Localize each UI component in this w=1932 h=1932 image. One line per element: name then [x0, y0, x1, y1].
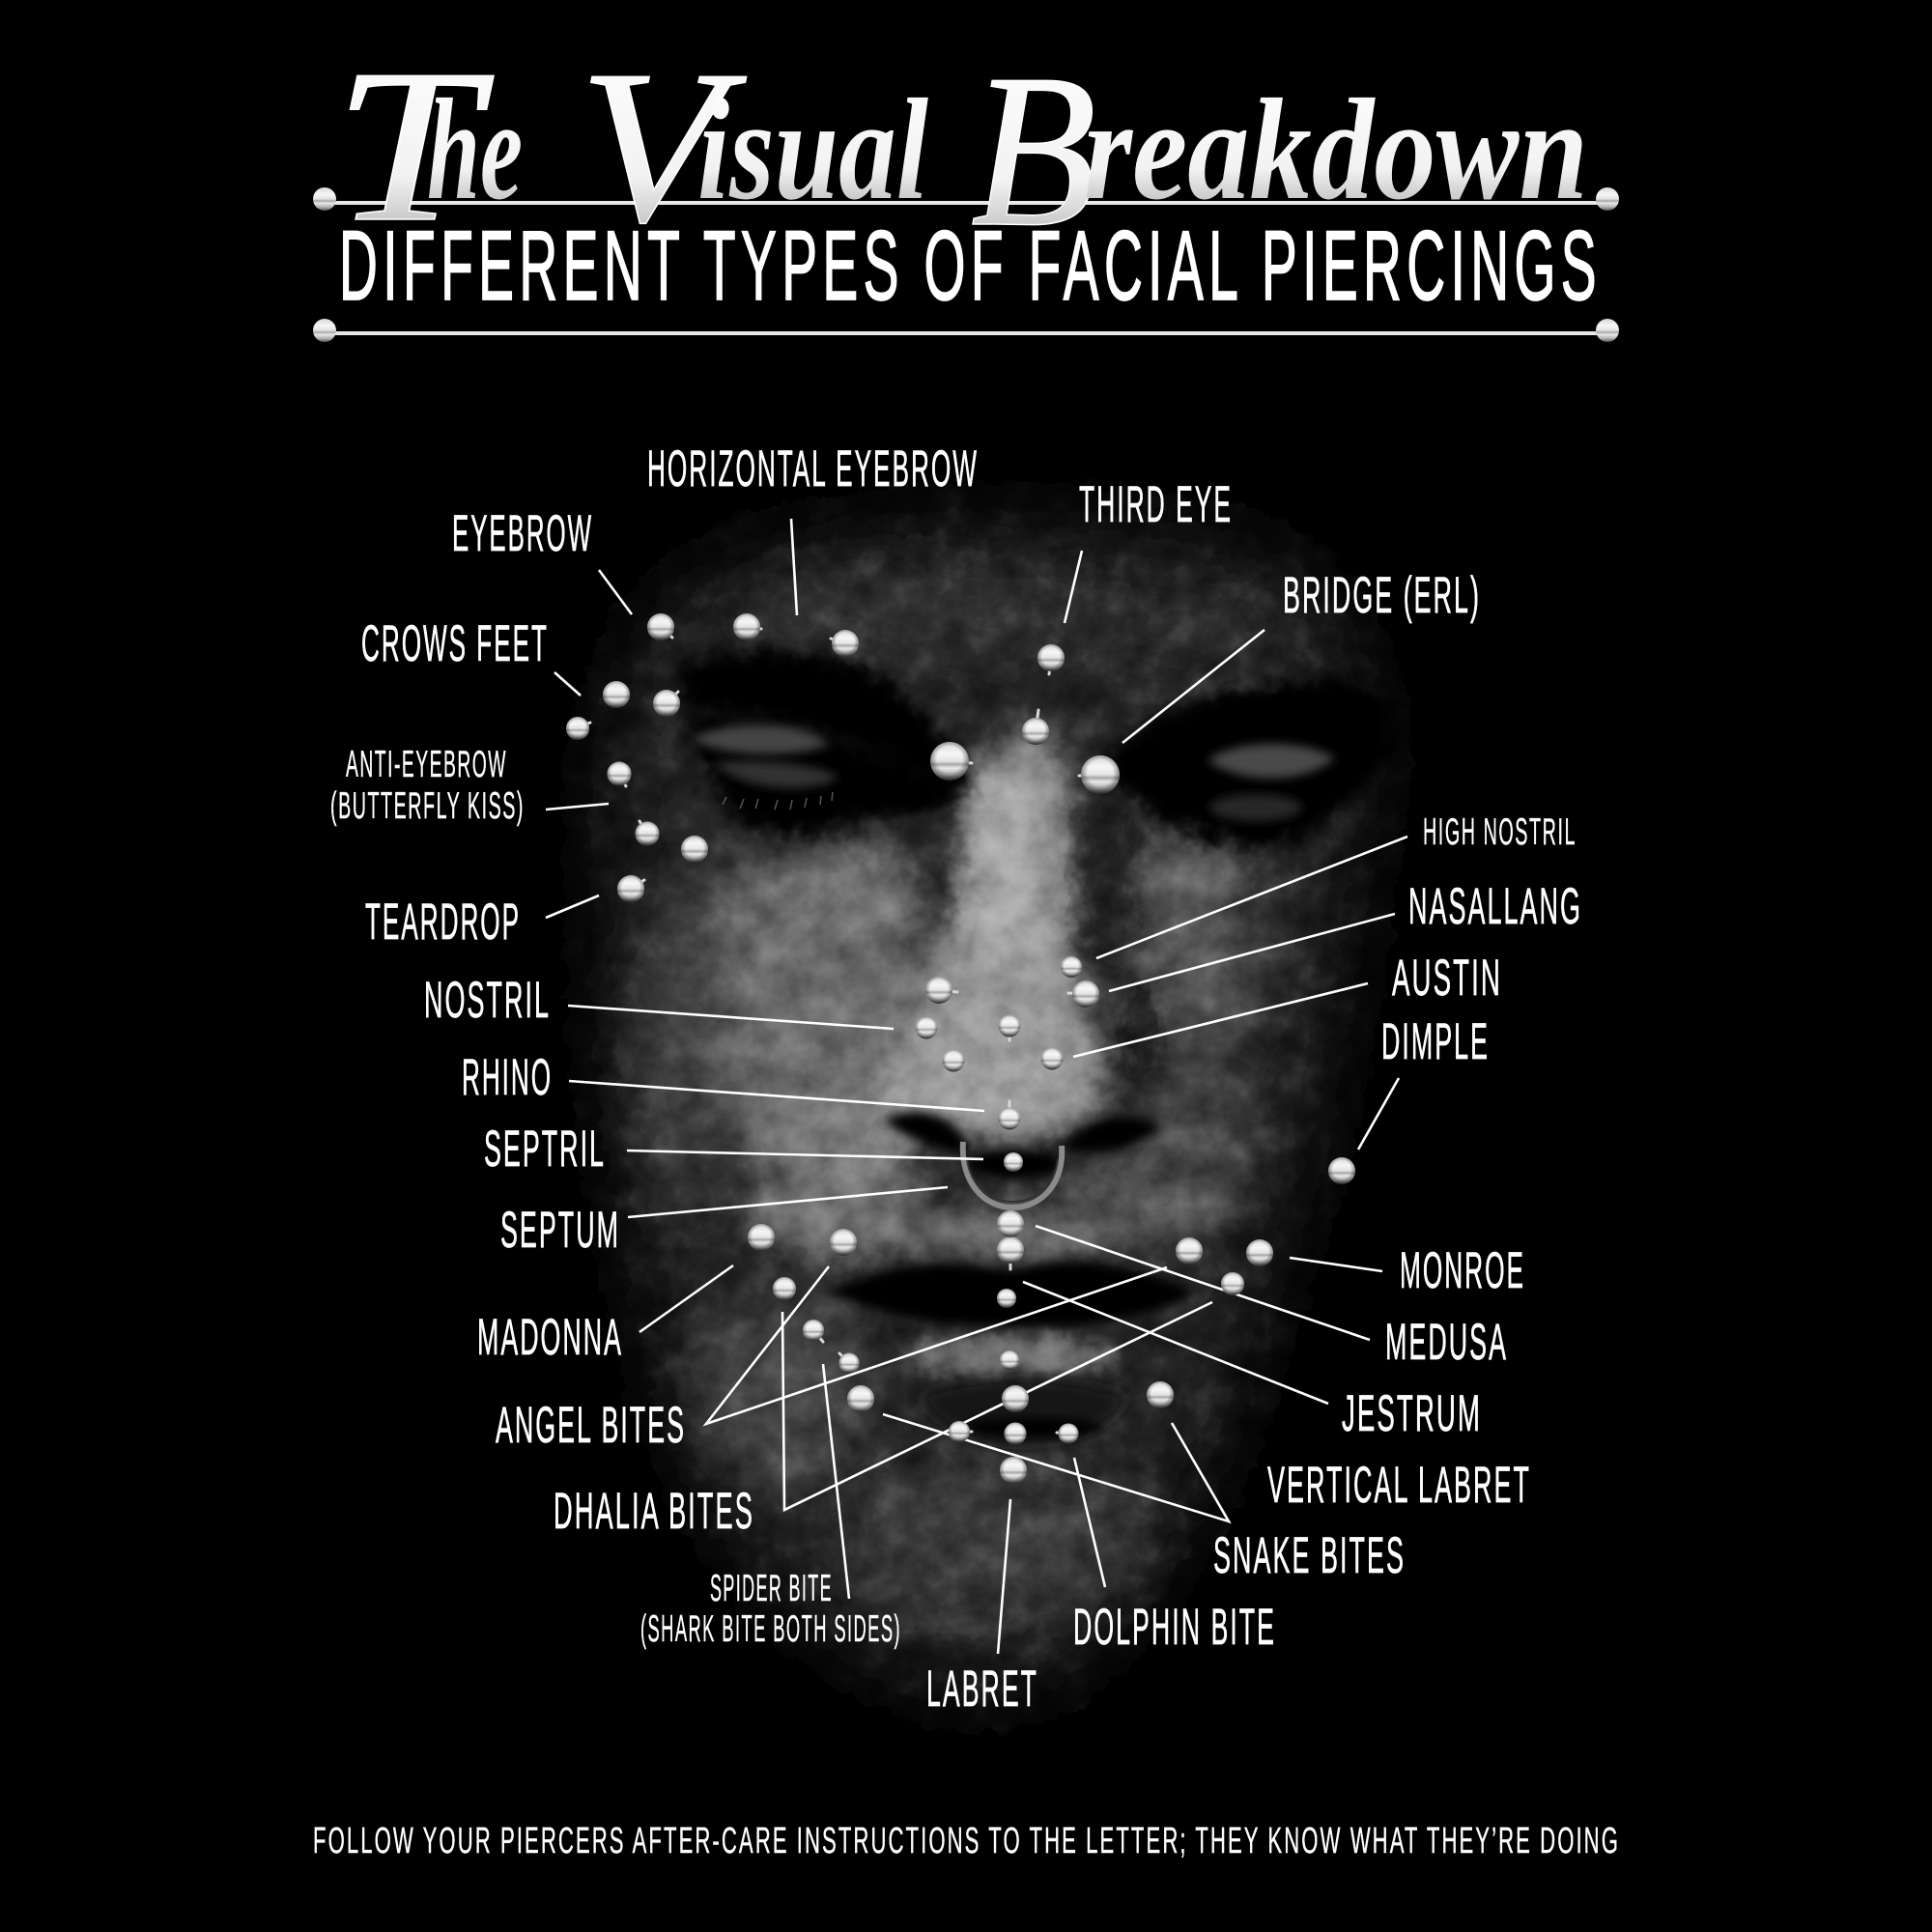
piercing balls — [566, 613, 1355, 1484]
label: ANTI-EYEBROW (BUTTERFLY KISS) — [330, 744, 525, 827]
right lower cheek — [1140, 1063, 1256, 1198]
left lower lid — [715, 761, 838, 788]
right eye socket and brow — [1101, 676, 1393, 850]
left brow — [676, 650, 966, 792]
head base — [610, 529, 1365, 1688]
label: ANTI-EYEBROW (BUTTERFLY KISS): (BUTTERFLY KISS) — [330, 785, 525, 827]
text: THIRD EYE — [1079, 476, 1233, 533]
nose wing crease — [1126, 980, 1157, 1077]
nose highlight — [966, 787, 1048, 966]
barbell rule: lower — [313, 319, 1619, 342]
label: MADONNA: MADONNA — [477, 1309, 623, 1366]
label: DIMPLE: DIMPLE — [1381, 1013, 1490, 1070]
right cheek — [1125, 879, 1261, 1053]
left eye socket — [681, 710, 966, 838]
label: BRIDGE (ERL): BRIDGE (ERL) — [1283, 567, 1481, 624]
title: The Visual Breakdown: V — [579, 26, 747, 269]
right nostril — [1063, 1117, 1159, 1151]
title: The Visual Breakdown: T — [333, 25, 494, 268]
label: SEPTUM: SEPTUM — [500, 1202, 620, 1259]
label: SPIDER BITE (SHARK BITE BOTH SIDES) — [640, 1568, 901, 1650]
label: DHALIA BITES: DHALIA BITES — [554, 1483, 754, 1540]
nose tip highlight — [879, 1065, 947, 1119]
label: MEDUSA: MEDUSA — [1385, 1314, 1508, 1371]
text: EYEBROW — [452, 505, 593, 562]
face shading — [610, 529, 1393, 1688]
text: TEARDROP — [365, 894, 521, 951]
under-nose shadow — [968, 1150, 1061, 1179]
under right eye — [1135, 838, 1251, 892]
text: RHINO — [462, 1049, 553, 1106]
text: (SHARK BITE BOTH SIDES) — [640, 1608, 901, 1650]
text: CROWS FEET — [361, 615, 549, 672]
text: MONROE — [1400, 1242, 1525, 1299]
label: NASALLANG: NASALLANG — [1408, 878, 1582, 935]
label: VERTICAL LABRET: VERTICAL LABRET — [1267, 1457, 1531, 1514]
face portrait — [610, 529, 1393, 1688]
label: JESTRUM: JESTRUM — [1342, 1385, 1482, 1442]
under-eye cheek — [797, 857, 923, 930]
title: The Visual Breakdown — [333, 25, 1588, 272]
title: The Visual Breakdown: B — [971, 30, 1096, 272]
forehead right — [1072, 599, 1285, 657]
label: ANGEL BITES: ANGEL BITES — [496, 1397, 686, 1454]
label: LABRET: LABRET — [926, 1661, 1038, 1718]
lower lip shadow — [918, 1379, 1130, 1444]
label: SNAKE BITES: SNAKE BITES — [1213, 1527, 1406, 1584]
left nostril — [884, 1112, 971, 1154]
chin — [840, 1454, 1150, 1618]
upper lip left — [749, 1164, 932, 1261]
label: SPIDER BITE (SHARK BITE BOTH SIDES): SPIDER BITE — [710, 1568, 833, 1609]
forehead left — [744, 570, 1092, 647]
label: ANTI-EYEBROW (BUTTERFLY KISS): ANTI-EYEBROW — [346, 744, 507, 785]
title: The Visual Breakdown: he — [427, 70, 523, 230]
right nose shadow — [1084, 802, 1125, 966]
left eyelid — [691, 725, 829, 754]
jaw left — [696, 1294, 869, 1488]
right lower lid — [1209, 794, 1302, 821]
left cheek — [715, 840, 937, 1198]
left outer cheek — [638, 889, 724, 1217]
septum ring — [963, 1142, 1062, 1208]
barbell rule: upper — [313, 187, 1619, 211]
lower nose highlight — [923, 1005, 1077, 1111]
upper lip right — [1058, 1154, 1232, 1251]
beside left nostril — [778, 1101, 923, 1179]
title: The Visual Breakdown: reakdown — [1084, 70, 1588, 230]
title: The Visual Breakdown: isual — [697, 70, 928, 230]
lower lip line — [964, 1418, 1103, 1437]
upper lip center — [903, 1203, 1116, 1261]
left lashes — [723, 792, 833, 810]
lower lip tone — [905, 1334, 1114, 1377]
right eyelid — [1208, 744, 1335, 779]
nose — [874, 720, 1111, 1154]
piercing bar stubs — [578, 627, 1100, 1434]
label: DOLPHIN BITE: DOLPHIN BITE — [1073, 1599, 1276, 1656]
label: HIGH NOSTRIL: HIGH NOSTRIL — [1423, 811, 1577, 853]
text: HORIZONTAL EYEBROW — [647, 440, 979, 497]
label: NOSTRIL: NOSTRIL — [424, 972, 551, 1029]
label: SEPTRIL: SEPTRIL — [484, 1121, 606, 1178]
label: AUSTIN: AUSTIN — [1392, 950, 1502, 1007]
mouth — [831, 1263, 1193, 1326]
leader lines — [546, 519, 1407, 1654]
